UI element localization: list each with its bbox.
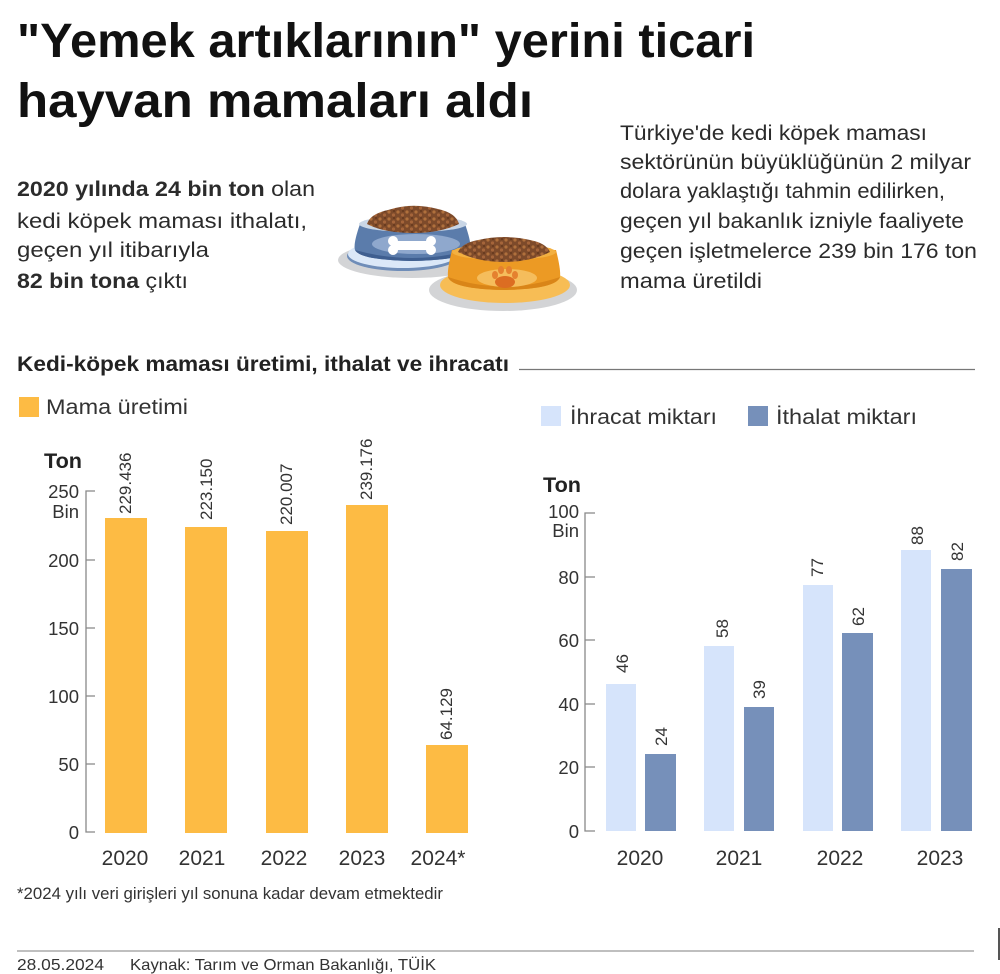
source line: 28.05.2024 xyxy=(17,957,104,974)
bar chart: export and import: 2022 xyxy=(817,847,863,870)
bar chart: export and import: Ton xyxy=(543,474,581,497)
bar chart: export and import: 88 xyxy=(908,526,927,545)
legend: export and import: İhracat miktarı xyxy=(570,405,717,429)
icon: blue bowl with bone xyxy=(338,206,486,278)
bar chart: export and import: 20 xyxy=(558,757,579,778)
text block: import summary: 2020 yılında 24 bin ton olan xyxy=(17,177,315,201)
bar chart: export and import: 77 xyxy=(808,558,827,577)
bar chart: production: 50 xyxy=(58,754,79,775)
bar chart: export and import: 62 xyxy=(849,607,868,626)
legend: export and import xyxy=(541,405,917,429)
icon: orange bowl with paw xyxy=(429,237,577,311)
bar chart: production: 220.007 xyxy=(277,464,296,525)
bar chart: production: 2024* xyxy=(411,847,465,870)
title xyxy=(17,15,755,128)
text block: sector summary: mama üretildi xyxy=(620,269,762,293)
bar chart: export and import: 60 xyxy=(558,630,579,651)
bar chart: export and import: 2023 xyxy=(917,847,963,870)
bar chart: export and import: 24 xyxy=(652,727,671,746)
bar chart: production: 239.176 xyxy=(357,439,376,500)
bar chart: production: Ton xyxy=(44,450,82,473)
text block: import summary: 82 bin tona çıktı xyxy=(17,269,188,293)
title: "Yemek artıklarının" yerini ticari xyxy=(17,15,755,68)
text block: sector summary xyxy=(620,121,977,293)
bar chart: export and import: 2020 xyxy=(617,847,663,870)
bar chart: production: 2021 xyxy=(179,847,225,870)
bar chart: production: 223.150 xyxy=(197,459,216,520)
legend: export and import: İthalat miktarı xyxy=(776,405,917,429)
text block: import summary: geçen yıl itibarıyla xyxy=(17,238,209,262)
bar chart: export and import: 100 xyxy=(548,501,579,522)
bar chart: export and import: 39 xyxy=(750,680,769,699)
bar chart: production: Bin xyxy=(52,501,79,522)
bar chart: production: 64.129 xyxy=(437,688,456,740)
bar chart: production: 250 xyxy=(48,481,79,502)
text block: sector summary: geçen yıl bakanlık izniyle faaliyete xyxy=(620,209,964,233)
bar chart: export and import: Bin xyxy=(552,520,579,541)
bar chart: production: 0 xyxy=(69,822,79,843)
text block: sector summary: Türkiye'de kedi köpek maması xyxy=(620,121,927,145)
bar chart: export and import: 40 xyxy=(558,694,579,715)
bar chart: export and import: 0 xyxy=(569,821,579,842)
bar chart: export and import: 82 xyxy=(948,542,967,561)
source line: Kaynak: Tarım ve Orman Bakanlığı, TÜİK xyxy=(130,955,436,974)
bar chart: production: 100 xyxy=(48,686,79,707)
bar chart: production: 2022 xyxy=(261,847,307,870)
bar chart: production xyxy=(44,439,468,870)
bar chart: export and import: 46 xyxy=(613,654,632,673)
text block: sector summary: geçen işletmelerce 239 bin 176 ton xyxy=(620,239,977,263)
bar chart: export and import: 58 xyxy=(713,619,732,638)
bar chart: export and import xyxy=(543,474,972,870)
bar chart: production: 200 xyxy=(48,550,79,571)
text block: import summary: kedi köpek maması ithalatı, xyxy=(17,209,307,233)
icon: food bowls xyxy=(338,206,577,311)
bar chart: production: 150 xyxy=(48,618,79,639)
bar chart: export and import: 2021 xyxy=(716,847,762,870)
bar chart: export and import: 80 xyxy=(558,567,579,588)
bar chart: production: 229.436 xyxy=(116,453,135,514)
legend: production: Mama üretimi xyxy=(46,395,188,419)
section heading: Kedi-köpek maması üretimi, ithalat ve ihracatı xyxy=(17,353,509,376)
text block: sector summary: sektörünün büyüklüğünün 2 milyar xyxy=(620,150,971,174)
text block: import summary xyxy=(17,177,315,293)
source line xyxy=(17,955,436,974)
title: hayvan mamaları aldı xyxy=(17,75,533,128)
bar chart: production: 2020 xyxy=(102,847,148,870)
text block: sector summary: dolara yaklaştığı tahmin edilirken, xyxy=(620,179,945,203)
footnote: *2024 yılı veri girişleri yıl sonuna kadar devam etmektedir xyxy=(17,884,443,903)
bar chart: production: 2023 xyxy=(339,847,385,870)
